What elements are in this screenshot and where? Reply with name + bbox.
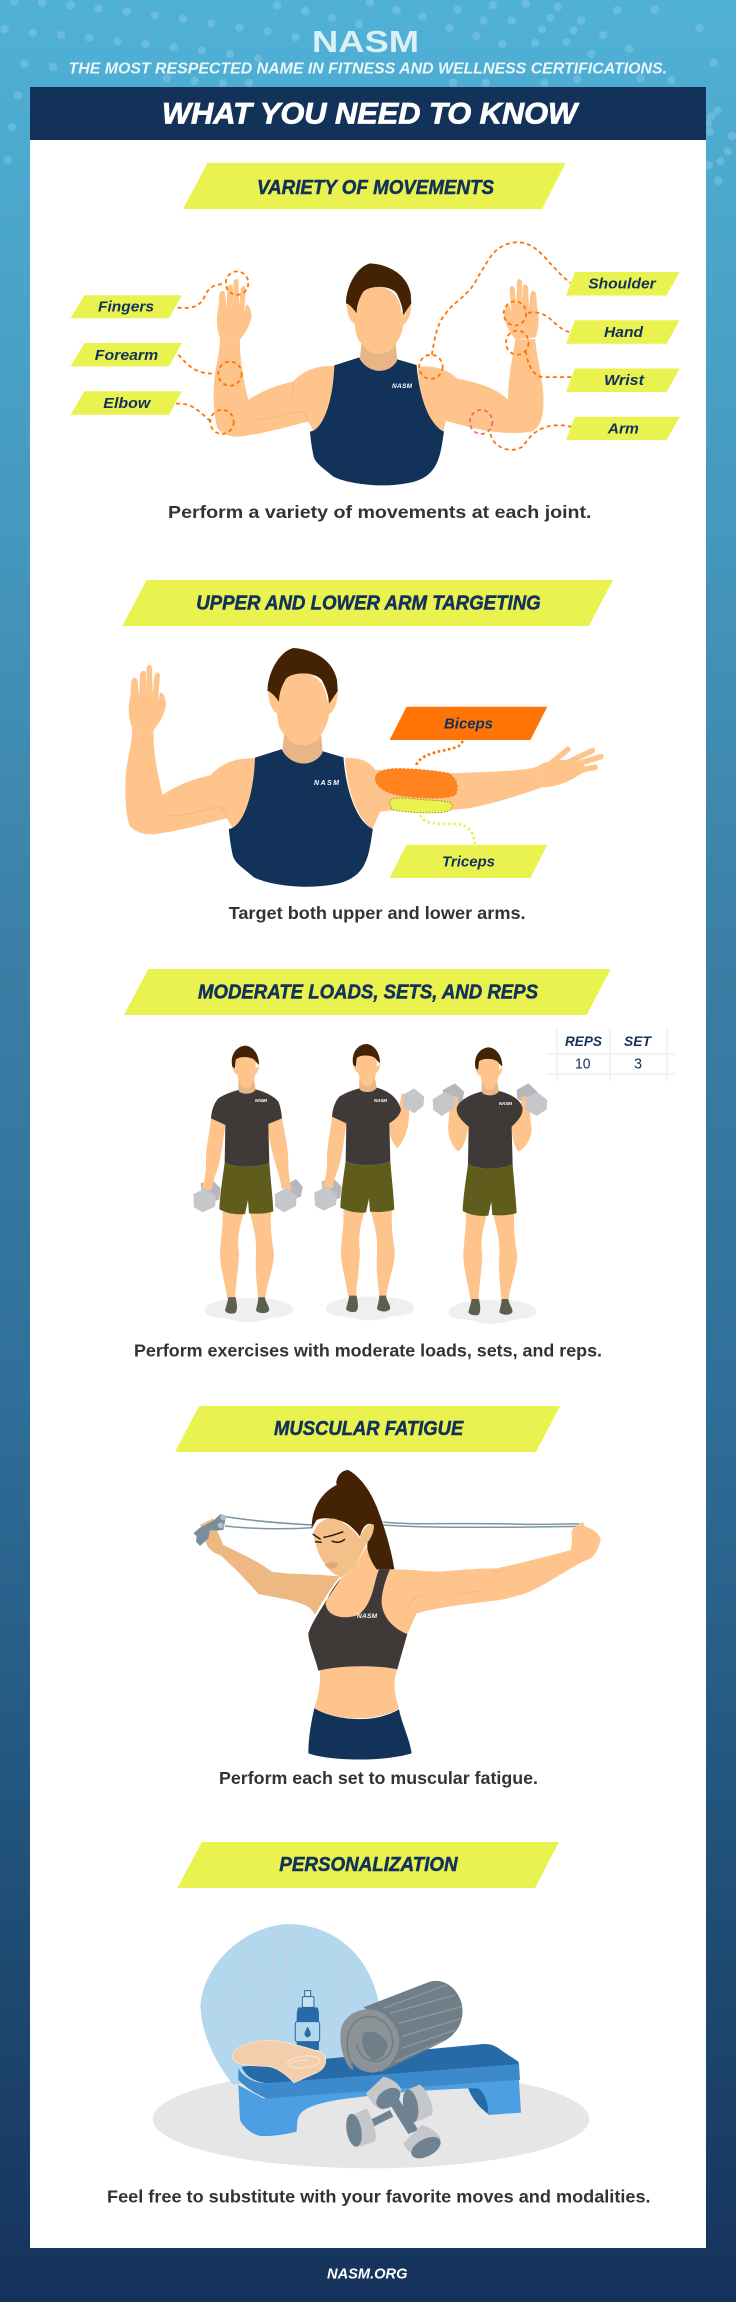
caption: Target both upper and lower arms. bbox=[229, 903, 526, 923]
figure: man, arms down: NASM bbox=[255, 1098, 267, 1103]
table: reps and sets: REPS bbox=[565, 1033, 603, 1049]
figure: woman with resistance band: NASM bbox=[357, 1613, 378, 1620]
label: Arm: Arm bbox=[607, 421, 639, 438]
figure: man, both arms curled bbox=[433, 1047, 547, 1324]
label: Triceps bbox=[390, 845, 547, 878]
banner: personalization: PERSONALIZATION bbox=[279, 1854, 458, 1876]
water bottle bbox=[295, 1991, 320, 2050]
footer: NASM.ORG: NASM.ORG bbox=[327, 2266, 408, 2283]
title bar bbox=[30, 87, 706, 140]
figure: man with arm extended bbox=[125, 648, 601, 887]
caption: Perform each set to muscular fatigue. bbox=[219, 1768, 538, 1788]
section: personalization bbox=[107, 1842, 651, 2207]
label: Elbow bbox=[70, 391, 182, 415]
tagline: THE MOST RESPECTED NAME IN FITNESS AND WELLNESS CERTIFICATIONS. bbox=[68, 60, 667, 77]
banner: arm targeting bbox=[122, 580, 613, 626]
label: Hand bbox=[566, 320, 680, 344]
dumbbells bbox=[344, 2077, 444, 2163]
banner: variety of movements bbox=[183, 163, 566, 209]
section: variety of movements bbox=[70, 163, 680, 522]
label: Forearm: Forearm bbox=[95, 347, 158, 364]
illustration: fitness equipment bbox=[153, 1924, 589, 2168]
figure: man with raised arms bbox=[214, 263, 544, 485]
banner: muscular fatigue bbox=[175, 1406, 560, 1452]
logo: NASM: NASM bbox=[312, 24, 419, 59]
label: Wrist: Wrist bbox=[604, 372, 645, 389]
section: muscular fatigue bbox=[175, 1406, 601, 1788]
label: Triceps: Triceps bbox=[442, 853, 495, 870]
table: reps and sets bbox=[547, 1028, 675, 1082]
section: upper and lower arm targeting bbox=[122, 580, 613, 923]
caption: Perform a variety of movements at each joint. bbox=[168, 502, 592, 522]
step platform bbox=[238, 2044, 521, 2136]
figure: man, one arm curled bbox=[314, 1044, 424, 1320]
label: Biceps: Biceps bbox=[444, 715, 493, 732]
joint markers and connector lines bbox=[176, 242, 573, 450]
background dot pattern bbox=[0, 0, 736, 185]
banner: moderate loads bbox=[124, 969, 611, 1015]
caption: Feel free to substitute with your favorite moves and modalities. bbox=[107, 2187, 651, 2207]
figure: man, arms down bbox=[193, 1046, 303, 1322]
label: Forearm bbox=[70, 343, 182, 366]
label: Fingers bbox=[70, 295, 182, 318]
label: Wrist bbox=[566, 368, 680, 392]
banner: moderate loads: MODERATE LOADS, SETS, AND REPS bbox=[198, 981, 539, 1003]
figure: woman with resistance band bbox=[193, 1470, 601, 1760]
section: moderate loads, sets, and reps bbox=[124, 969, 675, 1361]
banner: personalization bbox=[177, 1842, 559, 1888]
figure: man with arm extended: NASM bbox=[314, 780, 339, 787]
banner: muscular fatigue: MUSCULAR FATIGUE bbox=[274, 1418, 464, 1440]
table: reps and sets: 10 bbox=[575, 1056, 590, 1073]
floor shadow bbox=[153, 2070, 589, 2168]
label: Hand: Hand bbox=[604, 324, 644, 341]
title: WHAT YOU NEED TO KNOW bbox=[162, 97, 580, 130]
towel bbox=[232, 2040, 326, 2083]
banner: arm targeting: UPPER AND LOWER ARM TARGETING bbox=[196, 592, 541, 614]
label: Shoulder bbox=[566, 272, 680, 296]
label: Fingers: Fingers bbox=[98, 299, 154, 316]
foam roller bbox=[340, 1981, 462, 2073]
figure: man, both arms curled: NASM bbox=[499, 1101, 512, 1106]
table: reps and sets: SET bbox=[624, 1033, 652, 1049]
label: Elbow: Elbow bbox=[103, 395, 152, 412]
caption: Perform exercises with moderate loads, sets, and reps. bbox=[134, 1341, 602, 1361]
shirt logo: NASM bbox=[392, 383, 413, 390]
label: Shoulder: Shoulder bbox=[588, 276, 657, 293]
exercise ball bbox=[201, 1924, 383, 2085]
banner: variety of movements: VARIETY OF MOVEMENTS bbox=[257, 177, 495, 199]
table: reps and sets: 3 bbox=[634, 1056, 642, 1073]
label: Biceps bbox=[390, 707, 547, 740]
figure: man, one arm curled: NASM bbox=[374, 1098, 387, 1103]
label: Arm bbox=[566, 417, 680, 440]
